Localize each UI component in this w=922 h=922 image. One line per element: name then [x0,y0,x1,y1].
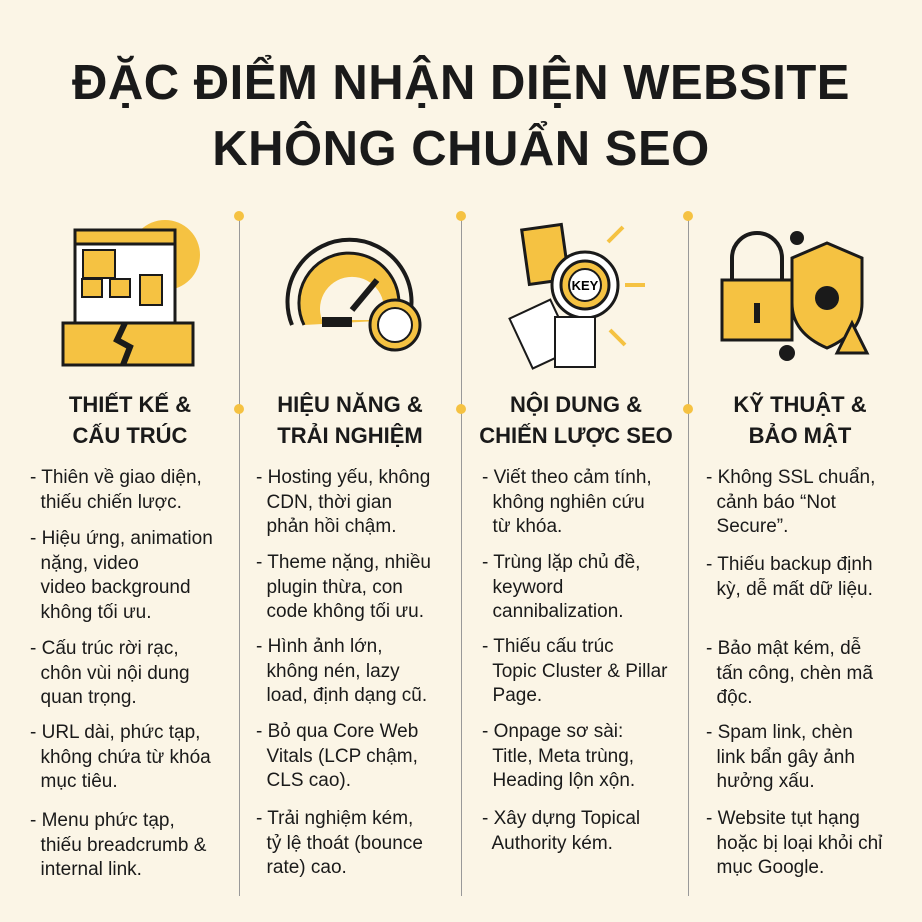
heading: col2: TRẢI NGHIỆM [277,423,423,448]
text: col2: - Theme nặng, nhiều [256,552,431,573]
text: col4: kỳ, dễ mất dữ liệu. [717,579,873,600]
text: col2: tỷ lệ thoát (bounce [267,833,423,854]
text: col3: - Viết theo cảm tính, [482,467,652,488]
text: col1 [30,467,213,880]
text: col1: thiếu breadcrumb & [41,835,206,856]
text: col4: link bẩn gây ảnh [717,747,855,768]
text: col3: Heading lộn xộn. [493,770,635,791]
text: col3: keyword [493,577,563,598]
text: col4: - Thiếu backup định [706,554,873,575]
text: col2: rate) cao. [267,857,347,878]
text: col1: thiếu chiến lược. [41,492,182,513]
text: col1: - Menu phức tạp, [30,810,175,831]
text: col2: code không tối ưu. [267,601,424,622]
heading: col4 [733,392,867,448]
text: col2: - Trải nghiệm kém, [256,808,413,829]
text: col3: Page. [493,685,542,706]
icon: speedometer [286,238,422,352]
text: col3: cannibalization. [493,601,624,622]
text: col2 [256,467,431,878]
text: col3: - Onpage sơ sài: [482,721,623,742]
text: col4: Secure”. [717,516,788,537]
text: col2: - Hình ảnh lớn, [256,636,383,657]
icon: broken website [62,220,200,366]
heading: col1: THIẾT KẾ & [69,392,191,417]
icon: keyword target: KEY [572,278,599,293]
text: col3: - Trùng lặp chủ đề, [482,552,640,573]
text: col3: không nghiên cứu [493,492,645,513]
text: col4: hoặc bị loại khỏi chỉ [717,833,882,854]
icon: lock and shield [720,231,870,361]
text: col1: - URL dài, phức tạp, [30,722,200,743]
text: col1: không tối ưu. [41,602,152,623]
text: col1: video background [41,577,191,598]
text: col3: Topic Cluster & Pillar [492,661,668,682]
text: col2: load, định dạng cũ. [267,685,427,706]
text: col4: - Bảo mật kém, dễ [706,638,861,659]
heading: col1 [69,392,191,448]
text: col1: internal link. [41,859,142,880]
text: col2: Vitals (LCP chậm, [267,746,418,767]
icon: keyword target [508,222,645,370]
text: col3: - Xây dựng Topical [482,808,640,829]
heading: col4: BẢO MẬT [749,423,851,448]
text: col4: tấn công, chèn mã [717,663,873,684]
text: col1: - Cấu trúc rời rạc, [30,638,179,659]
heading: col2: HIỆU NĂNG & [277,392,423,417]
text: col1: không chứa từ khóa [41,747,211,768]
heading: col3: CHIẾN LƯỢC SEO [479,423,673,448]
text: col1: mục tiêu. [41,771,118,792]
text: col4: hưởng xấu. [717,771,815,792]
text: col1: chôn vùi nội dung [41,663,190,684]
text: col2: - Bỏ qua Core Web [256,721,418,742]
title: KHÔNG CHUẨN SEO [212,122,710,176]
text: col3: Title, Meta trùng, [492,746,634,767]
text: col1: - Thiên về giao diện, [30,467,202,488]
text: col4: - Không SSL chuẩn, [706,467,875,488]
heading: col2 [277,392,423,448]
title [72,54,850,176]
text: col2: CDN, thời gian [267,492,392,513]
text: col4: cảnh báo “Not [717,492,836,513]
text: col1: quan trọng. [41,687,137,708]
text: col1: - Hiệu ứng, animation [30,528,213,549]
heading: col4: KỸ THUẬT & [733,392,867,417]
text: col3: Authority kém. [492,833,613,854]
text: col3 [482,467,668,854]
text: col4 [706,467,882,878]
text: col4: độc. [717,687,752,708]
text: col2: - Hosting yếu, không [256,467,430,488]
heading: col1: CẤU TRÚC [73,423,187,448]
heading: col3: NỘI DUNG & [510,392,642,417]
text: col3: từ khóa. [493,516,562,537]
text: col2: phản hồi chậm. [267,516,396,537]
text: col3: - Thiếu cấu trúc [482,636,614,657]
text: col1: nặng, video [41,553,139,574]
text: col2: không nén, lazy [267,661,400,682]
text: col2: CLS cao). [267,770,351,791]
text: col4: - Website tụt hạng [706,808,860,829]
text: col4: - Spam link, chèn [706,722,853,743]
title: ĐẶC ĐIỂM NHẬN DIỆN WEBSITE [72,56,850,110]
text: col4: mục Google. [717,857,824,878]
text: col2: plugin thừa, con [267,577,403,598]
heading: col3 [479,392,673,448]
